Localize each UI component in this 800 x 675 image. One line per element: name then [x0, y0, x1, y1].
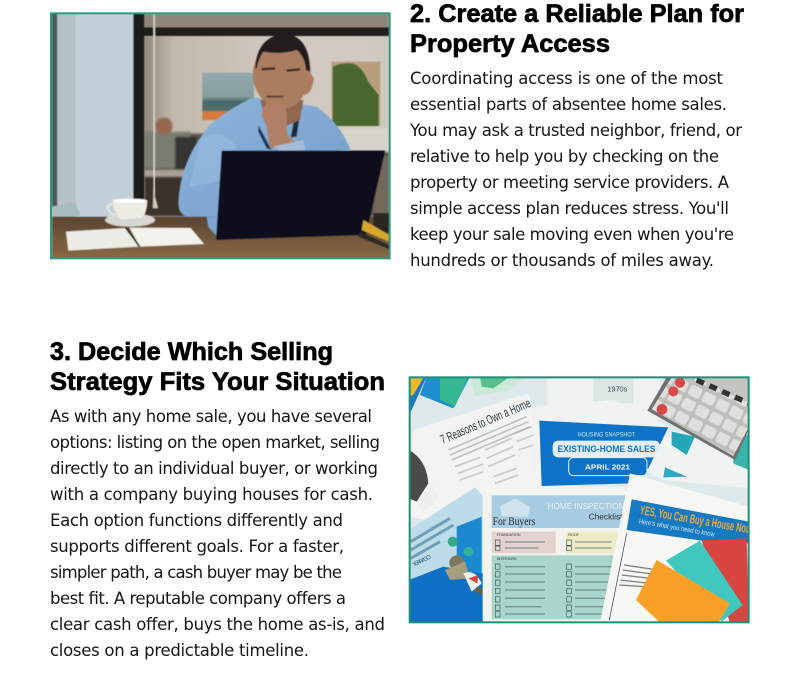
dark keys left	[409, 450, 428, 502]
text block: section 3 body: directly to an individual buyer, or working	[50, 459, 378, 478]
flyer subheading: Here's what you need to know	[638, 518, 716, 539]
heading: section 3: Strategy Fits Your Situation	[50, 368, 385, 396]
existing home sales flyer	[533, 400, 670, 490]
text block: section 3 body: closes on a predictable timeline.	[50, 641, 309, 660]
lower left blue flyer	[410, 488, 483, 580]
white document: 7 reasons	[410, 393, 557, 523]
window area	[52, 13, 57, 213]
photo: real estate documents and calculator: ROOF	[568, 533, 580, 537]
right white paper and teal	[648, 430, 749, 488]
heading: section 3	[50, 338, 385, 396]
heading: section 3: 3. Decide Which Selling	[50, 338, 333, 366]
cup and saucer	[105, 213, 155, 227]
photo: man thinking at laptop	[51, 13, 390, 258]
text block: section 2 body: Coordinating access is one of the most	[410, 69, 724, 88]
heading: section 2	[410, 0, 744, 58]
heading: section 2: Property Access	[410, 30, 610, 58]
text block: section 3 body: options: listing on the open market, selling	[50, 433, 380, 452]
flyer caption: YEAR AGO	[412, 554, 433, 568]
document title: 7 Reasons to Own a Home	[438, 396, 533, 447]
photo: real estate documents and calculator: HOUSING SNAPSHOT	[578, 433, 635, 439]
text block: section 3 body: supports different goals. For a faster,	[50, 537, 344, 556]
yes you can buy flyer	[600, 473, 749, 623]
text block: section 2 body: keep your sale moving even when you're	[410, 225, 734, 244]
heading: section 2: 2. Create a Reliable Plan for	[410, 0, 744, 28]
text block: section 3 body: with a company buying houses for cash.	[50, 485, 373, 504]
notebook	[66, 228, 138, 251]
text block: section 2 body	[409, 69, 742, 270]
calculator	[647, 377, 749, 460]
colored cards	[702, 538, 749, 623]
photo: real estate documents and calculator: APRIL 2021	[585, 463, 631, 472]
hand	[262, 99, 297, 148]
table	[52, 217, 389, 258]
text block: section 2 body: property or meeting service providers. A	[410, 173, 730, 192]
top left corner papers	[410, 378, 426, 412]
text block: section 3 body	[50, 407, 385, 660]
paintings	[202, 73, 254, 120]
photo: real estate documents and calculator: EXISTING-HOME SALES	[558, 444, 655, 454]
text block: section 2 body: simple access plan reduces stress. You'll	[410, 199, 729, 218]
text block: section 3 body: best fit. A reputable company offers a	[50, 589, 346, 608]
text block: section 3 body: As with any home sale, you have several	[50, 407, 372, 426]
photo: real estate documents and calculator: 1970s	[607, 385, 628, 394]
text block: section 3 body: Each option functions differently and	[50, 511, 343, 530]
photo: real estate documents and calculator: FOUNDATION	[497, 533, 521, 537]
photo: real estate documents and calculator: HOME INSPECTION	[548, 502, 625, 511]
checklist sheet	[483, 487, 626, 623]
blind cord	[153, 13, 155, 200]
photo: real estate documents and calculator: For Buyers	[493, 516, 535, 528]
text block: section 3 body: simpler path, a cash buyer may be the	[50, 563, 342, 582]
text block: section 2 body: You may ask a trusted neighbor, friend, or	[409, 121, 742, 140]
text block: section 2 body: essential parts of absentee home sales.	[410, 95, 727, 114]
text block: section 2 body: hundreds or thousands of miles away.	[410, 251, 714, 270]
shirt	[178, 97, 351, 217]
text block: section 2 body: relative to help you by checking on the	[410, 147, 719, 166]
photo: real estate documents and calculator	[409, 377, 753, 623]
photo: real estate documents and calculator: Checklist	[589, 512, 623, 522]
neck and head	[260, 99, 304, 126]
photo: real estate documents and calculator: INTERIORS	[497, 557, 517, 561]
text block: section 3 body: clear cash offer, buys the home as-is, and	[50, 615, 385, 634]
laptop	[216, 151, 385, 240]
